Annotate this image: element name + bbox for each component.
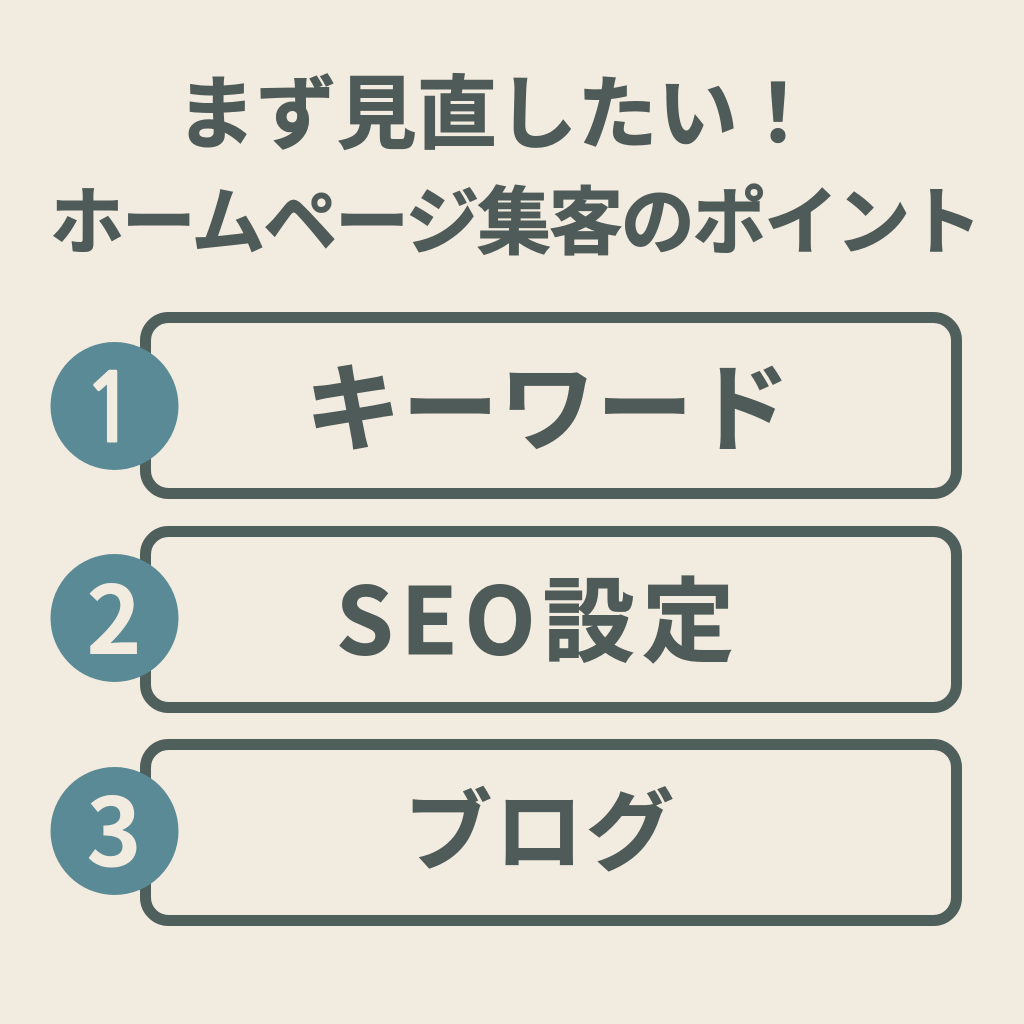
badge 2	[50, 546, 178, 682]
panel: SEO settings	[146, 532, 956, 708]
badge 3: 3	[86, 758, 142, 894]
badge 1	[50, 342, 178, 470]
title	[50, 50, 982, 270]
panel: blog: ブログ	[404, 762, 674, 889]
title: まず見直したい！	[176, 50, 818, 166]
badge 3	[50, 758, 178, 895]
panel: keyword	[146, 318, 956, 494]
panel: SEO settings: SEO設定	[336, 548, 734, 681]
title: ホームページ集客のポイント	[50, 163, 982, 270]
panel: keyword: キーワード	[305, 332, 790, 471]
badge 1: 1	[81, 362, 139, 457]
panel: blog	[146, 744, 956, 920]
badge 2: 2	[86, 546, 142, 682]
